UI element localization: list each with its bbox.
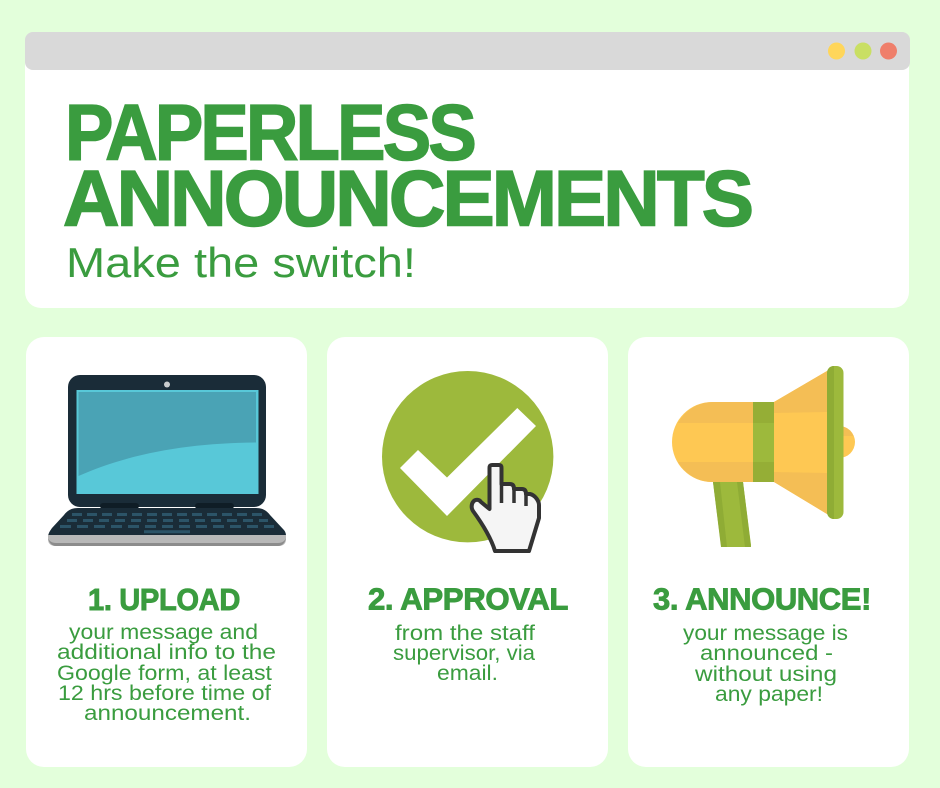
text: step 1 description: your message and bbox=[69, 621, 258, 644]
panel: title window bbox=[25, 32, 910, 308]
text: step 3 description bbox=[683, 622, 848, 706]
text: step 1 description: Google form, at least bbox=[57, 662, 272, 685]
panel: step 1 upload bbox=[26, 337, 307, 767]
panel: step 2 approval bbox=[327, 337, 608, 767]
window title bar bbox=[25, 32, 910, 70]
heading: step 2: 2. APPROVAL bbox=[368, 582, 568, 616]
icon: check mark with pointing hand bbox=[382, 371, 553, 551]
text: step 3 description: any paper! bbox=[715, 683, 823, 706]
text: step 1 description: additional info to the bbox=[57, 641, 276, 664]
title line 2: ANNOUNCEMENTS bbox=[63, 154, 751, 242]
text: step 2 description: supervisor, via bbox=[393, 642, 535, 665]
subtitle: Make the switch! bbox=[66, 239, 416, 286]
text: step 2 description: email. bbox=[437, 662, 498, 685]
window dot: yellow bbox=[828, 42, 845, 60]
heading: step 3: 3. ANNOUNCE! bbox=[653, 582, 871, 616]
text: step 1 description: announcement. bbox=[84, 702, 251, 725]
text: step 2 description bbox=[393, 622, 535, 685]
heading: step 1: 1. UPLOAD bbox=[88, 582, 240, 617]
text: step 1 description: 12 hrs before time of bbox=[58, 682, 271, 705]
title line 1: PAPERLESS bbox=[65, 88, 474, 176]
icon: laptop bbox=[48, 375, 286, 546]
panel: step 3 announce bbox=[628, 337, 909, 767]
text: step 1 description bbox=[57, 621, 276, 725]
text: step 3 description: announced - bbox=[700, 642, 833, 665]
text: step 2 description: from the staff bbox=[395, 622, 535, 645]
window dot: green bbox=[854, 42, 872, 60]
window dot: red bbox=[880, 42, 897, 60]
text: step 3 description: without using bbox=[694, 663, 837, 686]
icon: megaphone bbox=[672, 366, 855, 547]
text: step 3 description: your message is bbox=[683, 622, 848, 645]
